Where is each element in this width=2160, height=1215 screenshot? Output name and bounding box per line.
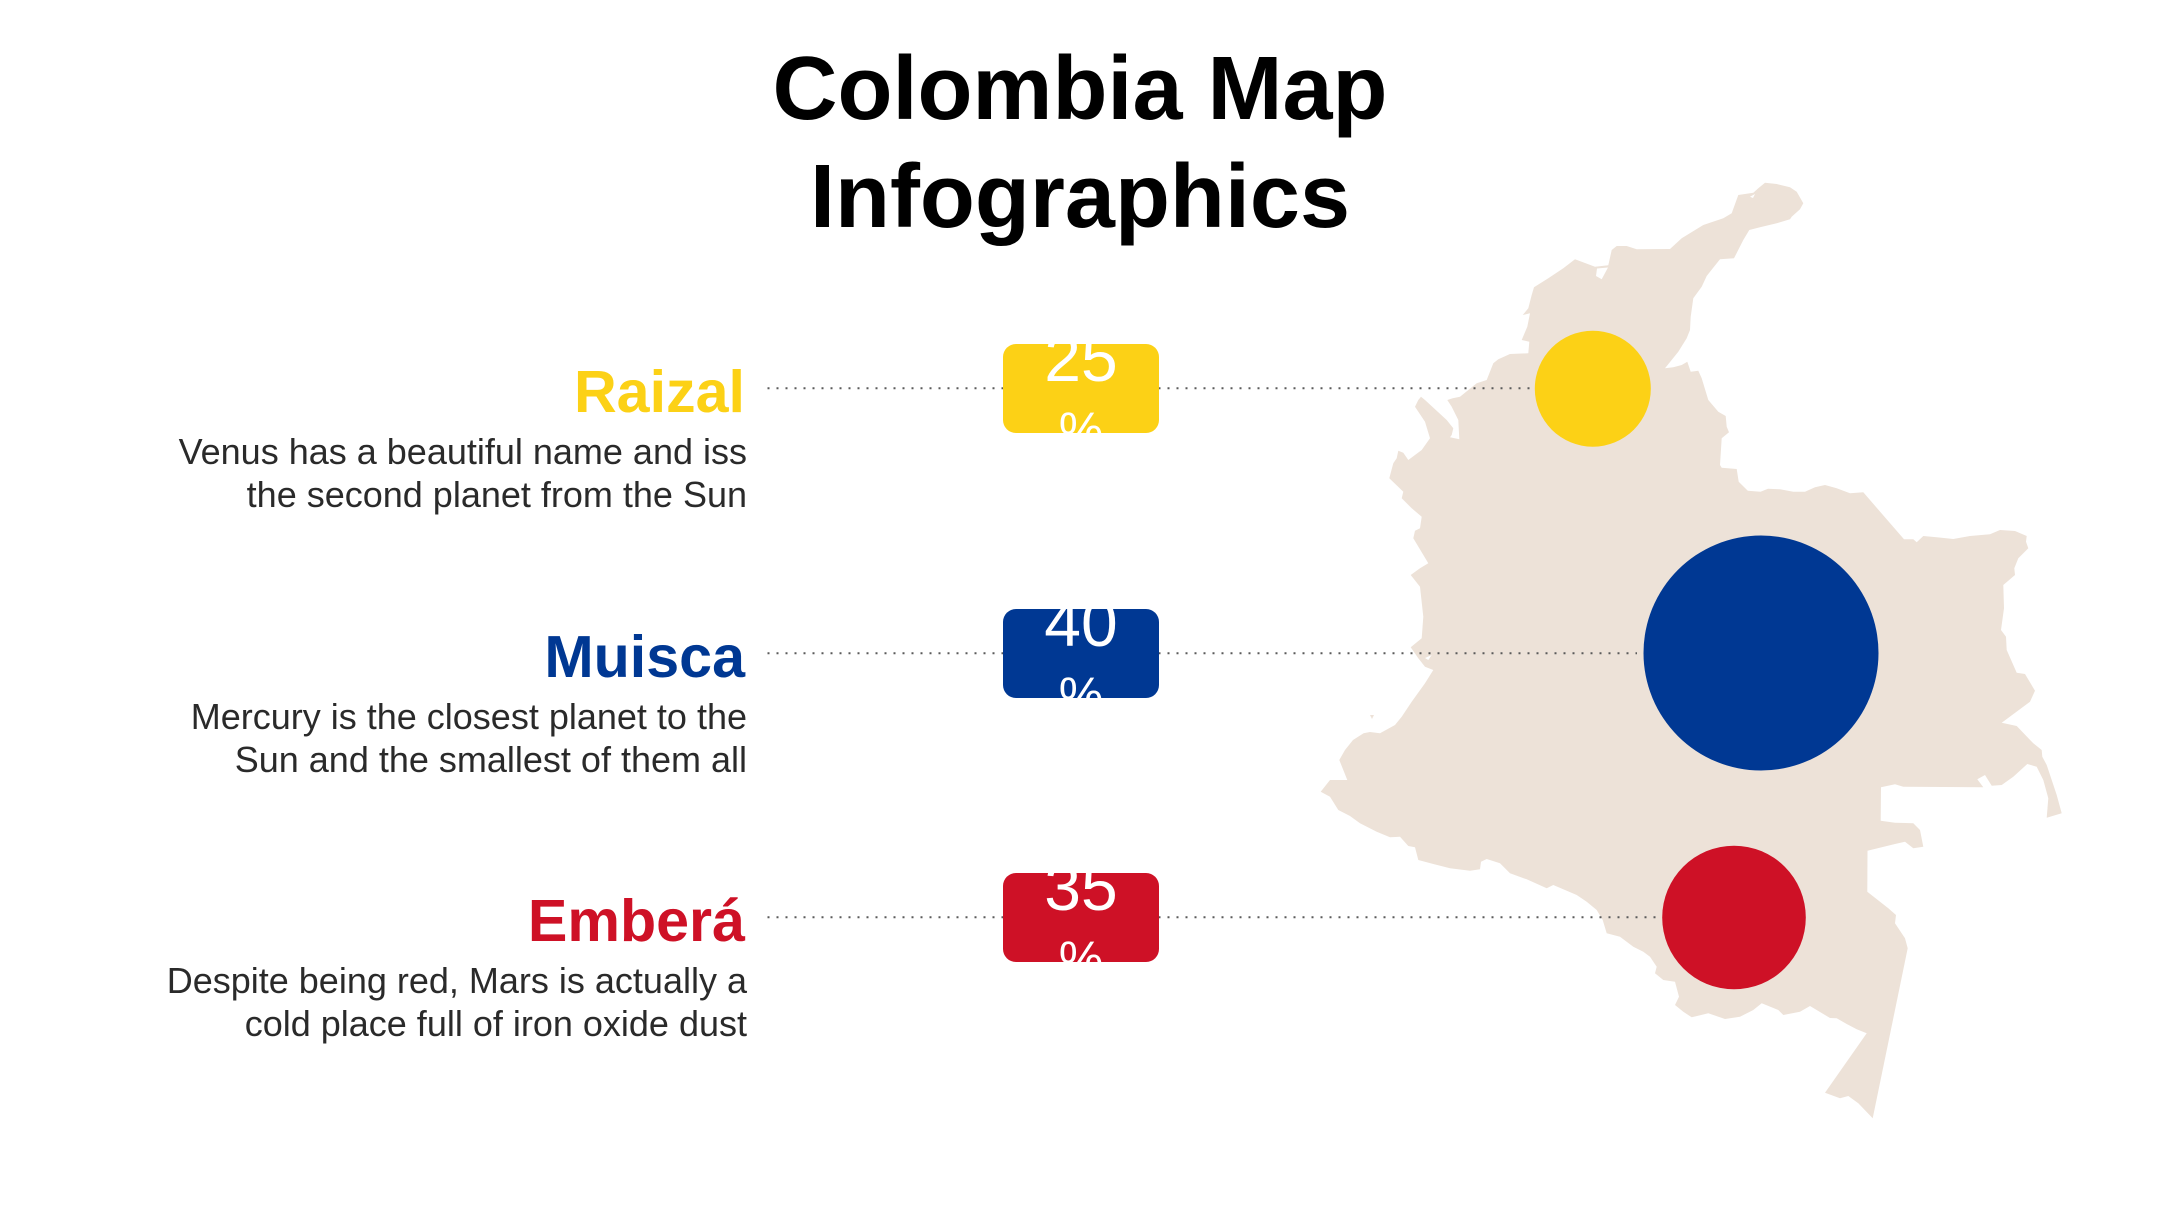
text: Muisca description (191, 696, 747, 780)
text: Muisca description: Sun and the smallest of them all (235, 739, 747, 780)
badge: Raizal 25%: % (1059, 402, 1103, 458)
badge: Emberá 35%: % (1059, 931, 1103, 987)
badge: Emberá 35% (1003, 873, 1159, 962)
text: Raizal description (178, 431, 747, 515)
text: Raizal description: Venus has a beautiful name and iss (179, 431, 747, 472)
title: Infographics (810, 147, 1350, 247)
badge: Raizal 25%: 25 (1044, 321, 1118, 395)
connector: Muisca dotted line (768, 652, 1637, 654)
text: Emberá description: cold place full of iron oxide dust (245, 1003, 747, 1044)
text: Emberá description (167, 960, 748, 1044)
badge: Emberá 35%: 35 (1044, 850, 1118, 924)
circle: Raizal 25% marker (1535, 331, 1651, 447)
text: Muisca description: Mercury is the closest planet to the (191, 696, 747, 737)
heading: Emberá: Emberá (528, 887, 745, 954)
heading: Muisca: Muisca (544, 623, 745, 690)
circle: Muisca 40% marker (1644, 536, 1878, 770)
badge: Muisca 40%: 40 (1044, 586, 1118, 660)
title (772, 39, 1388, 247)
connector: Emberá dotted line (768, 916, 1656, 918)
badge: Muisca 40% (1003, 609, 1159, 698)
heading: Raizal: Raizal (574, 358, 745, 425)
badge: Muisca 40%: % (1059, 667, 1103, 723)
badge: Raizal 25% (1003, 344, 1159, 433)
text: Emberá description: Despite being red, Mars is actually a (167, 960, 747, 1001)
circle: Emberá 35% marker (1662, 846, 1806, 989)
title: Colombia Map (772, 39, 1388, 139)
map: Colombia silhouette (1321, 183, 2062, 1118)
connector: Raizal dotted line (768, 387, 1530, 389)
text: Raizal description: the second planet from the Sun (247, 474, 747, 515)
